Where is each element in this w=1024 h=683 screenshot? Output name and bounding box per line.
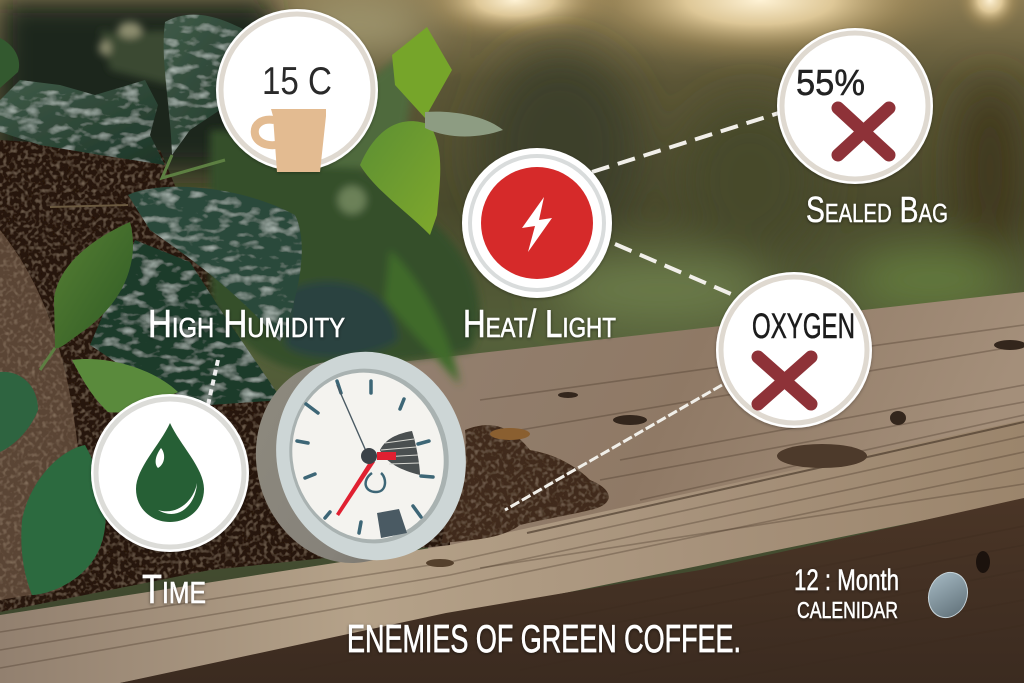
coffee leaves [0, 15, 503, 595]
label: heat light: HEAT/ LIGHT [463, 303, 616, 346]
circle icon: oxygen with cross: OXYGEN [752, 307, 855, 346]
dark soil and bark [0, 0, 609, 612]
middle wooden plank [0, 420, 1024, 683]
bright top leaf [392, 27, 452, 118]
dial rim [252, 329, 490, 583]
dotted connector from time icon to humidity label [208, 360, 218, 405]
back wooden board [400, 292, 1024, 560]
dial ticks [297, 381, 433, 533]
dial face [273, 355, 463, 557]
icon: lightning bolt [522, 197, 552, 252]
dark canopy behind leaves [0, 0, 280, 170]
icon: metal coin [922, 551, 990, 623]
bright right leaf [360, 121, 440, 235]
title: ENEMIES OF GREEN COFFEE. [347, 618, 741, 661]
circle icon: heat and light [462, 148, 612, 298]
connector lines [505, 112, 782, 510]
icon: drop [136, 423, 204, 522]
circle icon: 15 C cup: 15 C [262, 60, 332, 103]
small logo mark [366, 473, 385, 492]
large center leaf [128, 187, 302, 342]
circle icon: 55 percent with cross: 55% [796, 62, 865, 103]
large upper left leaf [0, 80, 165, 165]
label: time: TIME [142, 566, 206, 612]
circle icon: 15 C cup [216, 9, 378, 172]
lower green leaf [72, 359, 178, 413]
pale side leaf [425, 112, 503, 136]
wood grain lines [0, 325, 1024, 680]
dial case [232, 340, 458, 584]
circle icon: oxygen with cross [716, 272, 872, 428]
label: sealed bag: SEALED BAG [806, 189, 948, 230]
lower left leaf [21, 445, 106, 595]
top leaf [164, 15, 270, 155]
circle icon: water drop [91, 394, 249, 552]
icon: cross [838, 108, 889, 155]
label: 12 month calendar [794, 564, 899, 623]
circle icon: 55 percent with cross [777, 28, 933, 184]
dial hands [337, 385, 369, 458]
wood chips [426, 340, 1024, 567]
label: 12 month calendar: 12 : Month [794, 564, 899, 597]
grid gauge window [380, 431, 420, 475]
label: high humidity: HIGH HUMIDITY [148, 303, 345, 346]
dark lower leaf [90, 240, 282, 405]
bark trunk [0, 230, 110, 600]
mid green leaf [54, 222, 133, 348]
dark date window [377, 509, 407, 538]
soil pile [442, 425, 609, 543]
front plank face [120, 498, 1024, 683]
thermometer dial [232, 329, 490, 584]
blurred foliage mass [99, 22, 480, 385]
left edge leaf [0, 372, 38, 452]
leaf stems [40, 155, 225, 370]
icon: cup [255, 109, 326, 172]
icon: cross [758, 357, 811, 404]
label: 12 month calendar: CALENIDAR [797, 597, 898, 623]
